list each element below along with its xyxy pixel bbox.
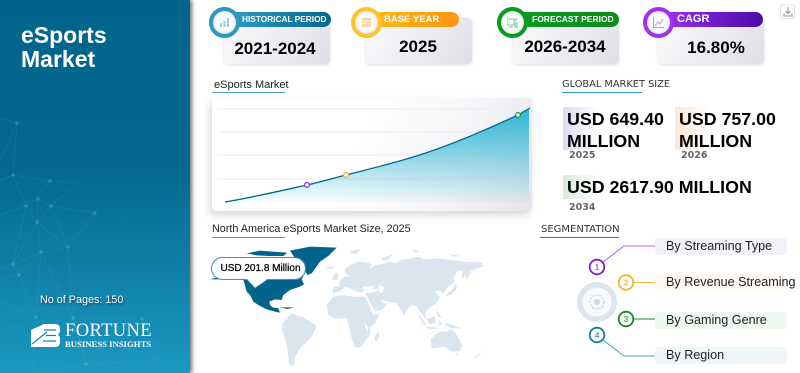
stat: 2025 size: 2025 (569, 150, 595, 161)
icon: bars (220, 18, 229, 27)
callout: USD 201.8 Million (211, 257, 306, 288)
heading: segmentation: SEGMENTATION (541, 224, 620, 235)
stat: 2026 size: MILLION (679, 131, 752, 151)
icon ring (209, 7, 240, 38)
icon ring (351, 7, 382, 38)
stat: 2026 size (675, 107, 776, 161)
marker 2034 (516, 113, 520, 117)
stat: 2034 size (563, 175, 752, 213)
segment row: streaming type (655, 238, 787, 255)
marker 2026 (344, 173, 348, 177)
segmentation diagram (577, 246, 655, 356)
value: 2021-2024 (234, 39, 316, 58)
panel: forecast period (497, 7, 620, 66)
line (225, 108, 530, 202)
badge 3: 3 (624, 314, 629, 324)
panel: left sidebar (0, 0, 190, 373)
card (366, 18, 472, 64)
central hub (577, 282, 617, 322)
value: 2026-2034 (524, 37, 606, 56)
pill label: HISTORICAL PERIOD (242, 14, 327, 24)
heading: global market size: GLOBAL MARKET SIZE (562, 79, 670, 90)
logo mark (31, 324, 60, 347)
title: eSports (21, 22, 107, 48)
pill label: CAGR (677, 13, 709, 25)
world map: rest of world (325, 250, 484, 358)
pill label (232, 12, 331, 27)
card (513, 18, 619, 64)
segment row: region (655, 347, 787, 364)
card (658, 18, 764, 64)
pill label (520, 12, 619, 27)
stat: 2025 size (563, 107, 664, 161)
panel: base year (351, 7, 473, 66)
marker 2025 (305, 183, 309, 187)
icon ring (497, 7, 528, 38)
card (224, 18, 330, 64)
stat: 2026 size: 2026 (681, 150, 707, 161)
world map: North America highlighted (210, 246, 337, 313)
segment row: gaming genre (655, 312, 787, 329)
value: 16.80% (687, 38, 745, 57)
icon: growth chart (653, 17, 664, 28)
icon: calendar (362, 18, 371, 27)
icon ring (643, 7, 674, 38)
segment row: gaming genre: By Gaming Genre (666, 313, 767, 327)
pill label: FORECAST PERIOD (532, 14, 614, 24)
badge 2: 2 (624, 278, 629, 288)
panel: historical period (209, 7, 331, 66)
stat: 2026 size: USD 757.00 (679, 109, 776, 129)
stat: 2034 size: USD 2617.90 MILLION (567, 177, 752, 197)
panel: CAGR (643, 7, 765, 66)
page count: No of Pages: 150 (40, 294, 123, 306)
stat: 2034 size: 2034 (569, 202, 595, 213)
pill label (372, 12, 459, 27)
stat: 2025 size: USD 649.40 (567, 109, 664, 129)
heading: eSports Market: eSports Market (214, 79, 289, 91)
area (225, 109, 529, 202)
stat: 2025 size: MILLION (567, 131, 640, 151)
pill label: BASE YEAR (384, 14, 439, 25)
segment row: revenue streaming: By Revenue Streaming (666, 275, 796, 289)
badge 4: 4 (595, 330, 600, 340)
area chart (212, 98, 532, 211)
logo: Fortune Business Insights (31, 321, 152, 349)
logo tagline: BUSINESS INSIGHTS (65, 339, 151, 349)
pill label (665, 12, 763, 27)
icon: download button (780, 4, 795, 19)
value: 2025 (399, 37, 437, 56)
logo wordmark: FORTUNE (65, 321, 152, 341)
segment row: streaming type: By Streaming Type (666, 239, 772, 253)
title: Market (21, 46, 95, 72)
world map: South America (282, 314, 316, 366)
callout: USD 201.8 Million: USD 201.8 Million (220, 263, 301, 274)
network decoration (0, 118, 160, 373)
title (21, 22, 107, 72)
heading: North America market size: North America eSports Market Size, 2025 (212, 223, 411, 235)
badge 1: 1 (595, 262, 600, 272)
icon: forecast chart (507, 18, 518, 28)
connectors (603, 246, 655, 356)
segment row: region: By Region (666, 348, 724, 362)
